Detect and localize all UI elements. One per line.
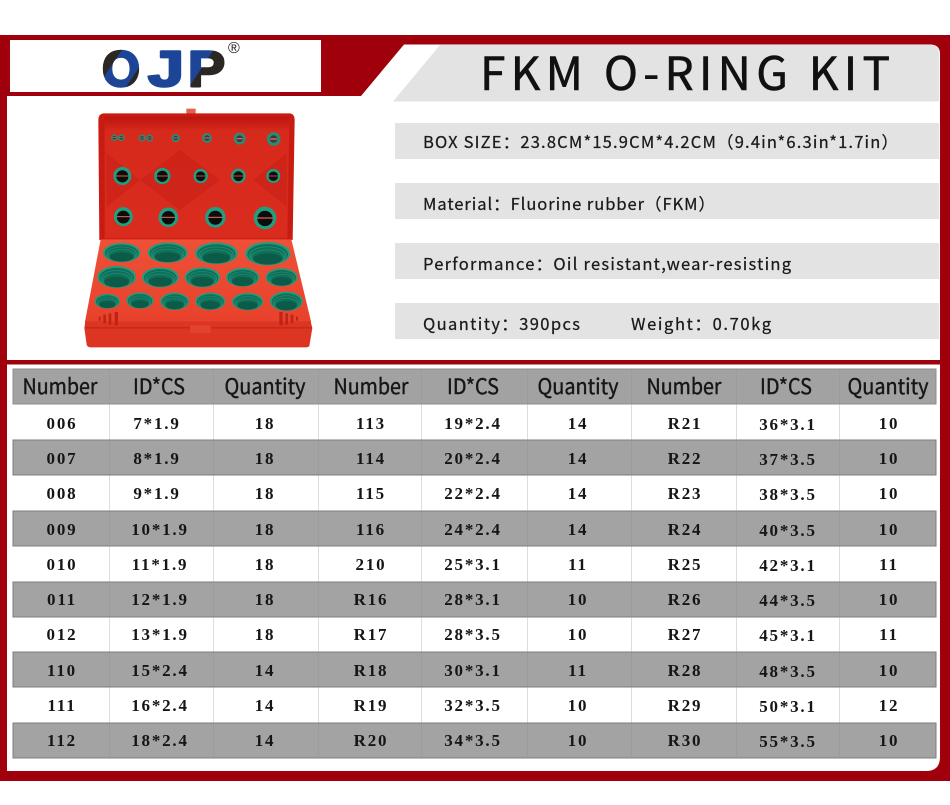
row 010: 11*1.9: [132, 555, 188, 574]
row 009: 10: [879, 520, 899, 539]
header row: Quantity: [848, 371, 929, 401]
row 010: 210: [356, 555, 386, 574]
row 006: 18: [255, 414, 275, 433]
row 009: 18: [255, 520, 275, 539]
row 006: 14: [568, 414, 588, 433]
info: material: [395, 183, 939, 219]
row 012: [47, 625, 899, 645]
row 007: 20*2.4: [444, 449, 502, 468]
row 012: 18: [255, 625, 275, 644]
case base tray: [85, 239, 311, 325]
info: box size: [395, 123, 939, 159]
row 012: R27: [668, 625, 702, 644]
row 012: 45*3.1: [759, 626, 817, 645]
info: material: Material：Fluorine rubber（FKM）: [423, 191, 715, 215]
row 006: [47, 414, 899, 434]
alternating row bands: [13, 440, 936, 758]
info: performance: Performance：Oil resistant,wear-resisting: [423, 251, 792, 275]
info: quantity and weight: [395, 303, 939, 339]
row 009: [47, 520, 899, 540]
row 011: 011: [47, 590, 77, 609]
row 111: 16*2.4: [131, 696, 189, 715]
row 006: 19*2.4: [444, 414, 502, 433]
info: performance: [395, 243, 939, 279]
lid rings: row 3: [114, 207, 276, 229]
row 011: 44*3.5: [759, 591, 817, 610]
logo: OJP: J: [148, 41, 184, 97]
header row: Number: [22, 371, 98, 401]
row 010: 11: [879, 555, 899, 574]
row 012: 10: [568, 625, 588, 644]
row 012: 11: [879, 625, 899, 644]
row 110: 30*3.1: [444, 661, 502, 680]
row 111: R19: [354, 696, 388, 715]
row 007: 18: [255, 449, 275, 468]
row 112: 18*2.4: [131, 731, 189, 750]
row 110: 110: [47, 661, 77, 680]
row 011: [47, 590, 899, 610]
case lid: [98, 113, 295, 240]
row 112: 112: [47, 731, 77, 750]
row 111: 14: [255, 696, 275, 715]
header row: [13, 369, 936, 404]
row 008: 10: [879, 484, 899, 503]
row 111: 50*3.1: [759, 697, 817, 716]
row 011: 28*3.1: [444, 590, 502, 609]
row 011: R16: [354, 590, 388, 609]
row 112: 14: [255, 731, 275, 750]
row 009: 40*3.5: [759, 521, 817, 540]
row 009: 10*1.9: [131, 520, 189, 539]
row 006: 006: [47, 414, 77, 433]
row 007: 114: [356, 449, 386, 468]
row 009: 009: [47, 520, 77, 539]
row 009: R24: [668, 520, 702, 539]
title band: [393, 45, 939, 102]
row 010: [47, 555, 899, 575]
logo panel: [10, 40, 321, 97]
lid rings: row 1: [111, 132, 280, 146]
header row: ID*CS: [447, 371, 499, 401]
base rings: row 2: [97, 266, 298, 288]
row 111: R29: [668, 696, 702, 715]
row 006: 113: [356, 414, 386, 433]
row 011: 10: [568, 590, 588, 609]
row 008: 18: [255, 484, 275, 503]
table panel: [7, 364, 940, 771]
row 009: 116: [356, 520, 386, 539]
case front lip: [84, 321, 312, 347]
top white panel: [7, 44, 940, 360]
row 112: R30: [668, 731, 702, 750]
row 007: 10: [879, 449, 899, 468]
row 008: 9*1.9: [133, 484, 181, 503]
row 010: 010: [47, 555, 77, 574]
logo: OJP: O: [102, 41, 140, 97]
row 111: 10: [568, 696, 588, 715]
row 012: 13*1.9: [131, 625, 189, 644]
row 010: R25: [668, 555, 702, 574]
row 110: 11: [568, 661, 588, 680]
row 006: 7*1.9: [133, 414, 181, 433]
row 110: R18: [354, 661, 388, 680]
row 011: 10: [879, 590, 899, 609]
row 010: 18: [255, 555, 275, 574]
row 110: [47, 661, 899, 681]
row 008: [47, 484, 899, 504]
row 012: 28*3.5: [444, 625, 502, 644]
header row: ID*CS: [133, 371, 185, 401]
row 010: 42*3.1: [759, 556, 817, 575]
case hinge tab: [186, 109, 196, 115]
row 112: 55*3.5: [759, 732, 817, 751]
row 111: 12: [879, 696, 899, 715]
row 112: 34*3.5: [444, 731, 502, 750]
row 110: 48*3.5: [759, 662, 817, 681]
row 110: 10: [879, 661, 899, 680]
base rings: row 1: [103, 242, 290, 265]
size table: [13, 369, 936, 758]
row 112: [47, 731, 899, 751]
row 110: 14: [255, 661, 275, 680]
row 011: 12*1.9: [131, 590, 189, 609]
row 110: R28: [668, 661, 702, 680]
row 010: 25*3.1: [444, 555, 502, 574]
row 112: 10: [879, 731, 899, 750]
row 111: [47, 696, 899, 716]
row 112: 10: [568, 731, 588, 750]
header row: Number: [646, 371, 722, 401]
row 007: 8*1.9: [133, 449, 181, 468]
row 007: 14: [568, 449, 588, 468]
title: FKM O-RING KIT: [480, 38, 890, 104]
row 007: 007: [47, 449, 77, 468]
row 008: 008: [47, 484, 77, 503]
row 008: 22*2.4: [444, 484, 502, 503]
row 012: R17: [354, 625, 388, 644]
row 111: 32*3.5: [444, 696, 502, 715]
row 007: 37*3.5: [759, 450, 817, 469]
lid rings: row 2: [113, 167, 280, 185]
logo: OJP: [102, 41, 225, 97]
info: quantity and weight: Quantity：390pcs: [423, 311, 580, 335]
row 111: 111: [47, 696, 77, 715]
row 009: 24*2.4: [444, 520, 502, 539]
row 012: 012: [47, 625, 77, 644]
row 011: R26: [668, 590, 702, 609]
registered mark: ®: [228, 40, 240, 57]
row 006: 10: [879, 414, 899, 433]
info: box size: BOX SIZE：23.8CM*15.9CM*4.2CM（9.4in*6.3in*1.7in）: [423, 129, 898, 153]
header row: Number: [334, 371, 409, 401]
row 006: R21: [668, 414, 702, 433]
case grip ridges: [99, 312, 298, 325]
base rings: row 3: [95, 292, 303, 311]
header row: ID*CS: [760, 371, 812, 401]
row 007: [47, 449, 899, 469]
row 008: 14: [568, 484, 588, 503]
product photo: red o-ring case: [84, 109, 312, 347]
info: quantity and weight: Weight：0.70kg: [631, 311, 772, 335]
row 006: 36*3.1: [759, 415, 817, 434]
row 112: R20: [354, 731, 388, 750]
row 008: 115: [356, 484, 386, 503]
row 007: R22: [668, 449, 702, 468]
row 008: 38*3.5: [759, 485, 817, 504]
row 009: 14: [568, 520, 588, 539]
row 110: 15*2.4: [131, 661, 189, 680]
row 010: 11: [568, 555, 588, 574]
case latch: [190, 325, 211, 333]
header row: Quantity: [538, 371, 619, 401]
row 011: 18: [255, 590, 275, 609]
row 008: R23: [668, 484, 702, 503]
header row: Quantity: [224, 371, 306, 401]
logo: OJP: P: [188, 41, 225, 97]
